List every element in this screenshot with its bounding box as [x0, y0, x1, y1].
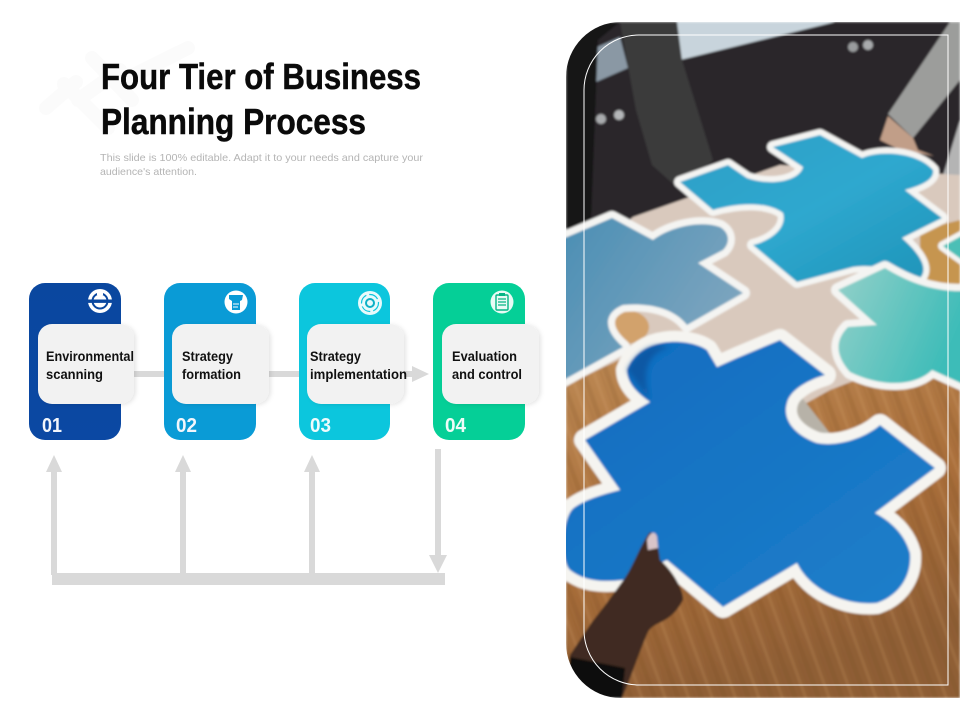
shadow on blue piece — [627, 345, 668, 400]
wood floor — [566, 220, 960, 698]
photo: hands assembling puzzle pieces — [560, 22, 960, 698]
card text — [38, 324, 134, 404]
feedback loop arrows — [46, 449, 447, 585]
puzzle piece: cyan — [680, 135, 942, 282]
table surface — [588, 163, 960, 404]
card text — [307, 324, 407, 404]
number: 03 — [310, 415, 331, 437]
card text: and control — [452, 366, 522, 382]
arrow up to card 03 — [304, 455, 320, 575]
subtitle — [100, 152, 424, 178]
puzzle piece: main blue — [564, 340, 935, 607]
card 01: environmental scanning — [29, 283, 134, 440]
title: Four Tier of Business — [101, 56, 421, 97]
card text: formation — [182, 366, 241, 382]
photo background — [566, 22, 960, 231]
feedback base bar — [52, 573, 445, 585]
arrow up to card 02 — [175, 455, 191, 575]
subtitle: This slide is 100% editable. Adapt it to your needs and capture your — [100, 152, 424, 164]
card 03: strategy implementation — [299, 283, 407, 440]
title: Planning Process — [101, 101, 366, 142]
card text: Strategy — [310, 348, 361, 364]
bottom hand — [566, 532, 683, 698]
puzzle piece: top-right teal — [943, 234, 960, 262]
card 04: evaluation and control — [433, 283, 539, 440]
number: 04 — [445, 415, 467, 437]
puzzle piece: teal — [838, 268, 960, 385]
icon: clipboard — [490, 290, 514, 314]
card text — [442, 324, 539, 404]
icon: steering wheel — [88, 289, 112, 313]
icon: gear cycle — [358, 291, 382, 315]
card text: scanning — [46, 366, 103, 382]
puzzle piece: slate blue — [560, 218, 743, 382]
card text — [172, 324, 269, 404]
number: 02 — [176, 415, 197, 437]
arrow down from card 04 — [429, 449, 447, 573]
subtitle: audience's attention. — [100, 166, 197, 178]
card text: Evaluation — [452, 348, 517, 364]
photo inner frame — [584, 35, 948, 685]
connector arrow between the cards — [134, 366, 429, 382]
watermark logo — [46, 48, 188, 128]
icon: strategy board — [224, 290, 248, 314]
card text: implementation — [310, 366, 407, 382]
card 02: strategy formation — [164, 283, 269, 440]
card text: Strategy — [182, 348, 233, 364]
card text: Environmental — [46, 348, 134, 364]
fingernail — [647, 533, 658, 550]
title — [101, 56, 421, 142]
number: 01 — [42, 415, 62, 437]
arrow up to card 01 — [46, 455, 62, 575]
